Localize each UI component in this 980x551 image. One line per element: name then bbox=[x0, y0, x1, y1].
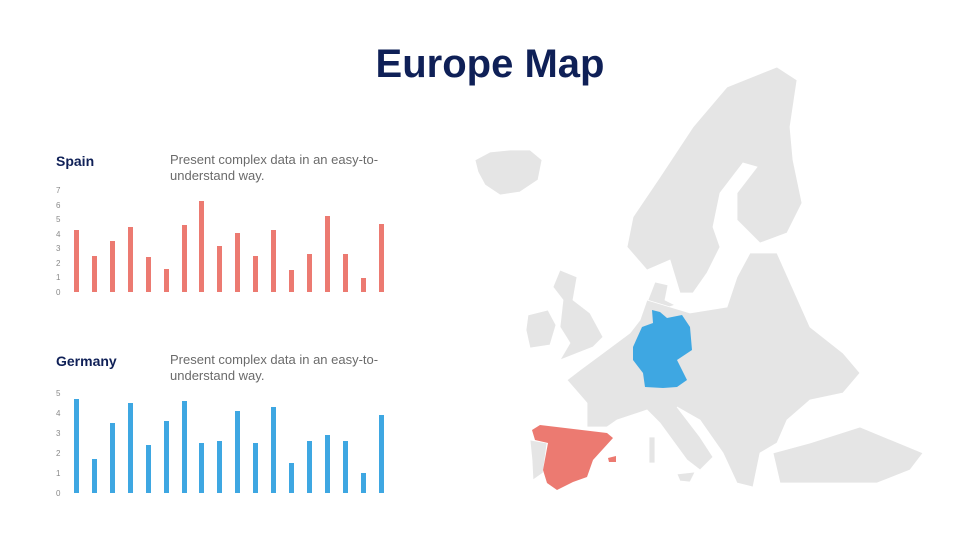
Iceland bbox=[475, 150, 542, 195]
Ireland bbox=[526, 310, 556, 348]
heading: Spain: Spain bbox=[56, 153, 94, 169]
bar chart: Germany: 3 bbox=[56, 429, 61, 438]
bar chart: Germany bbox=[56, 389, 384, 498]
bar chart: Spain: 2 bbox=[56, 259, 61, 268]
bar chart: Spain: 5 bbox=[56, 215, 61, 224]
islands bbox=[649, 437, 655, 463]
Denmark bbox=[648, 282, 675, 310]
bar chart: Germany: 4 bbox=[56, 409, 61, 418]
bar chart: Spain: 1 bbox=[56, 273, 61, 282]
title: Europe Map bbox=[376, 42, 604, 86]
bar chart: Germany: 2 bbox=[56, 449, 61, 458]
bar chart: Spain: 7 bbox=[56, 186, 61, 195]
bar chart: Germany: 1 bbox=[56, 469, 61, 478]
bar chart: Germany: 0 bbox=[56, 489, 61, 498]
heading: Germany: Germany bbox=[56, 353, 117, 369]
bar chart: Germany: 5 bbox=[56, 389, 61, 398]
Portugal bbox=[530, 440, 547, 480]
Turkey bbox=[773, 427, 923, 483]
Scandinavia bbox=[627, 67, 802, 293]
Spain bbox=[532, 425, 616, 490]
Germany bbox=[633, 310, 692, 388]
text: Germany description: Present complex data in an easy-to-understand way. bbox=[170, 352, 378, 383]
mainland bbox=[567, 253, 860, 487]
UK bbox=[553, 270, 603, 360]
text: Spain description: Present complex data in an easy-to-understand way. bbox=[170, 152, 378, 183]
bar chart: Spain: 0 bbox=[56, 288, 61, 297]
bar chart: Spain: 4 bbox=[56, 230, 61, 239]
bar chart: Spain: 6 bbox=[56, 201, 61, 210]
bar chart: Spain bbox=[56, 186, 384, 297]
bar chart: Spain: 3 bbox=[56, 244, 61, 253]
